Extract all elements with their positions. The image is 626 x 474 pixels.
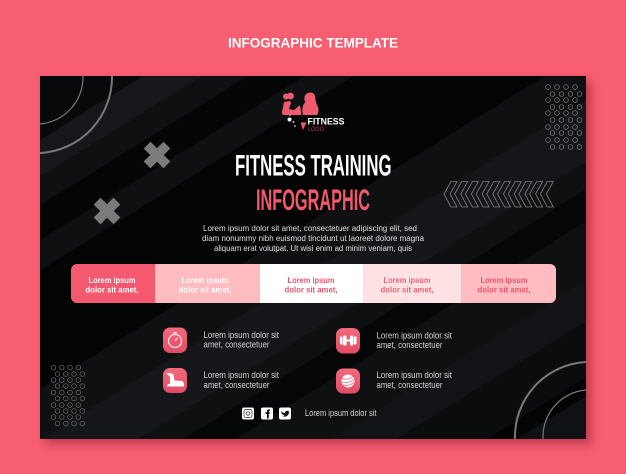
item text: top right: Lorem ipsum dolor sit <box>376 330 452 340</box>
item text: bottom right: Lorem ipsum dolor sit <box>376 370 452 380</box>
segment 4 <box>363 264 461 303</box>
segment 3: Lorem ipsum <box>288 276 334 285</box>
icon: sparkle dots <box>288 115 296 127</box>
icon: twitter <box>279 408 291 420</box>
panel: dark background <box>40 76 586 439</box>
icon: cross top <box>137 135 177 175</box>
title: fitness training: FITNESS TRAINING <box>235 150 392 182</box>
segment 2: dolor sit amet, <box>178 286 232 294</box>
segment 3 <box>260 264 363 303</box>
concentric arcs top left <box>40 76 112 153</box>
segment 2: Lorem ipsum <box>182 276 228 285</box>
icon: dumbbell <box>336 328 360 354</box>
item text: top right <box>376 330 452 350</box>
chevron row <box>444 182 553 207</box>
icon: instagram <box>242 408 254 420</box>
item text: bottom left: amet, consectetuer <box>204 380 270 390</box>
concentric arcs bottom right <box>515 362 586 439</box>
logo text: FITNESS <box>308 116 344 128</box>
item text: top left <box>204 330 279 350</box>
intro paragraph: aliquam erat volutpat. Ut wisi enim ad minim veniam, quis <box>214 243 412 253</box>
title: infographic: INFOGRAPHIC <box>256 184 370 217</box>
dot pattern bottom left <box>51 365 85 426</box>
segment 3: dolor sit amet, <box>284 286 338 294</box>
segment 1 <box>71 264 156 303</box>
item text: top right: amet, consectetuer <box>376 340 443 350</box>
dot pattern top right <box>546 85 582 149</box>
icon: treadmill <box>163 368 187 393</box>
icon: stopwatch <box>163 328 187 353</box>
item text: top left: Lorem ipsum dolor sit <box>204 330 279 340</box>
intro paragraph: Lorem ipsum dolor sit amet, consectetuer adipiscing elit, sed <box>203 223 417 233</box>
item text: bottom left <box>204 370 279 390</box>
segment 1: Lorem ipsum <box>88 276 136 285</box>
heading: infographic template: INFOGRAPHIC TEMPLATE <box>228 36 398 50</box>
item text: bottom right <box>376 370 452 390</box>
segment 5: Lorem ipsum <box>480 276 528 285</box>
segment 1: dolor sit amet, <box>86 286 138 294</box>
logo subtext: LOGO <box>308 127 324 133</box>
icon: facebook <box>261 408 273 420</box>
icon: exercise ball <box>336 368 360 394</box>
segment 2 <box>155 264 260 303</box>
segment 4: Lorem ipsum <box>384 276 430 285</box>
segment 5 <box>461 264 556 303</box>
intro paragraph <box>202 223 424 253</box>
intro paragraph: diam nonummy nibh euismod tincidunt ut laoreet dolore magna <box>202 233 424 243</box>
segment 4: dolor sit amet, <box>380 286 434 294</box>
segmented bar <box>71 264 556 303</box>
icon: cross bottom <box>87 191 127 231</box>
fitness logo <box>282 92 344 133</box>
segment 5: dolor sit amet, <box>478 286 530 294</box>
item text: bottom right: amet, consectetuer <box>376 380 443 390</box>
social caption: Lorem ipsum dolor sit <box>305 408 377 418</box>
item text: bottom left: Lorem ipsum dolor sit <box>204 370 279 380</box>
item text: top left: amet, consectetuer <box>204 340 270 350</box>
icon: dumbbell, arm and woman silhouette <box>282 92 319 130</box>
